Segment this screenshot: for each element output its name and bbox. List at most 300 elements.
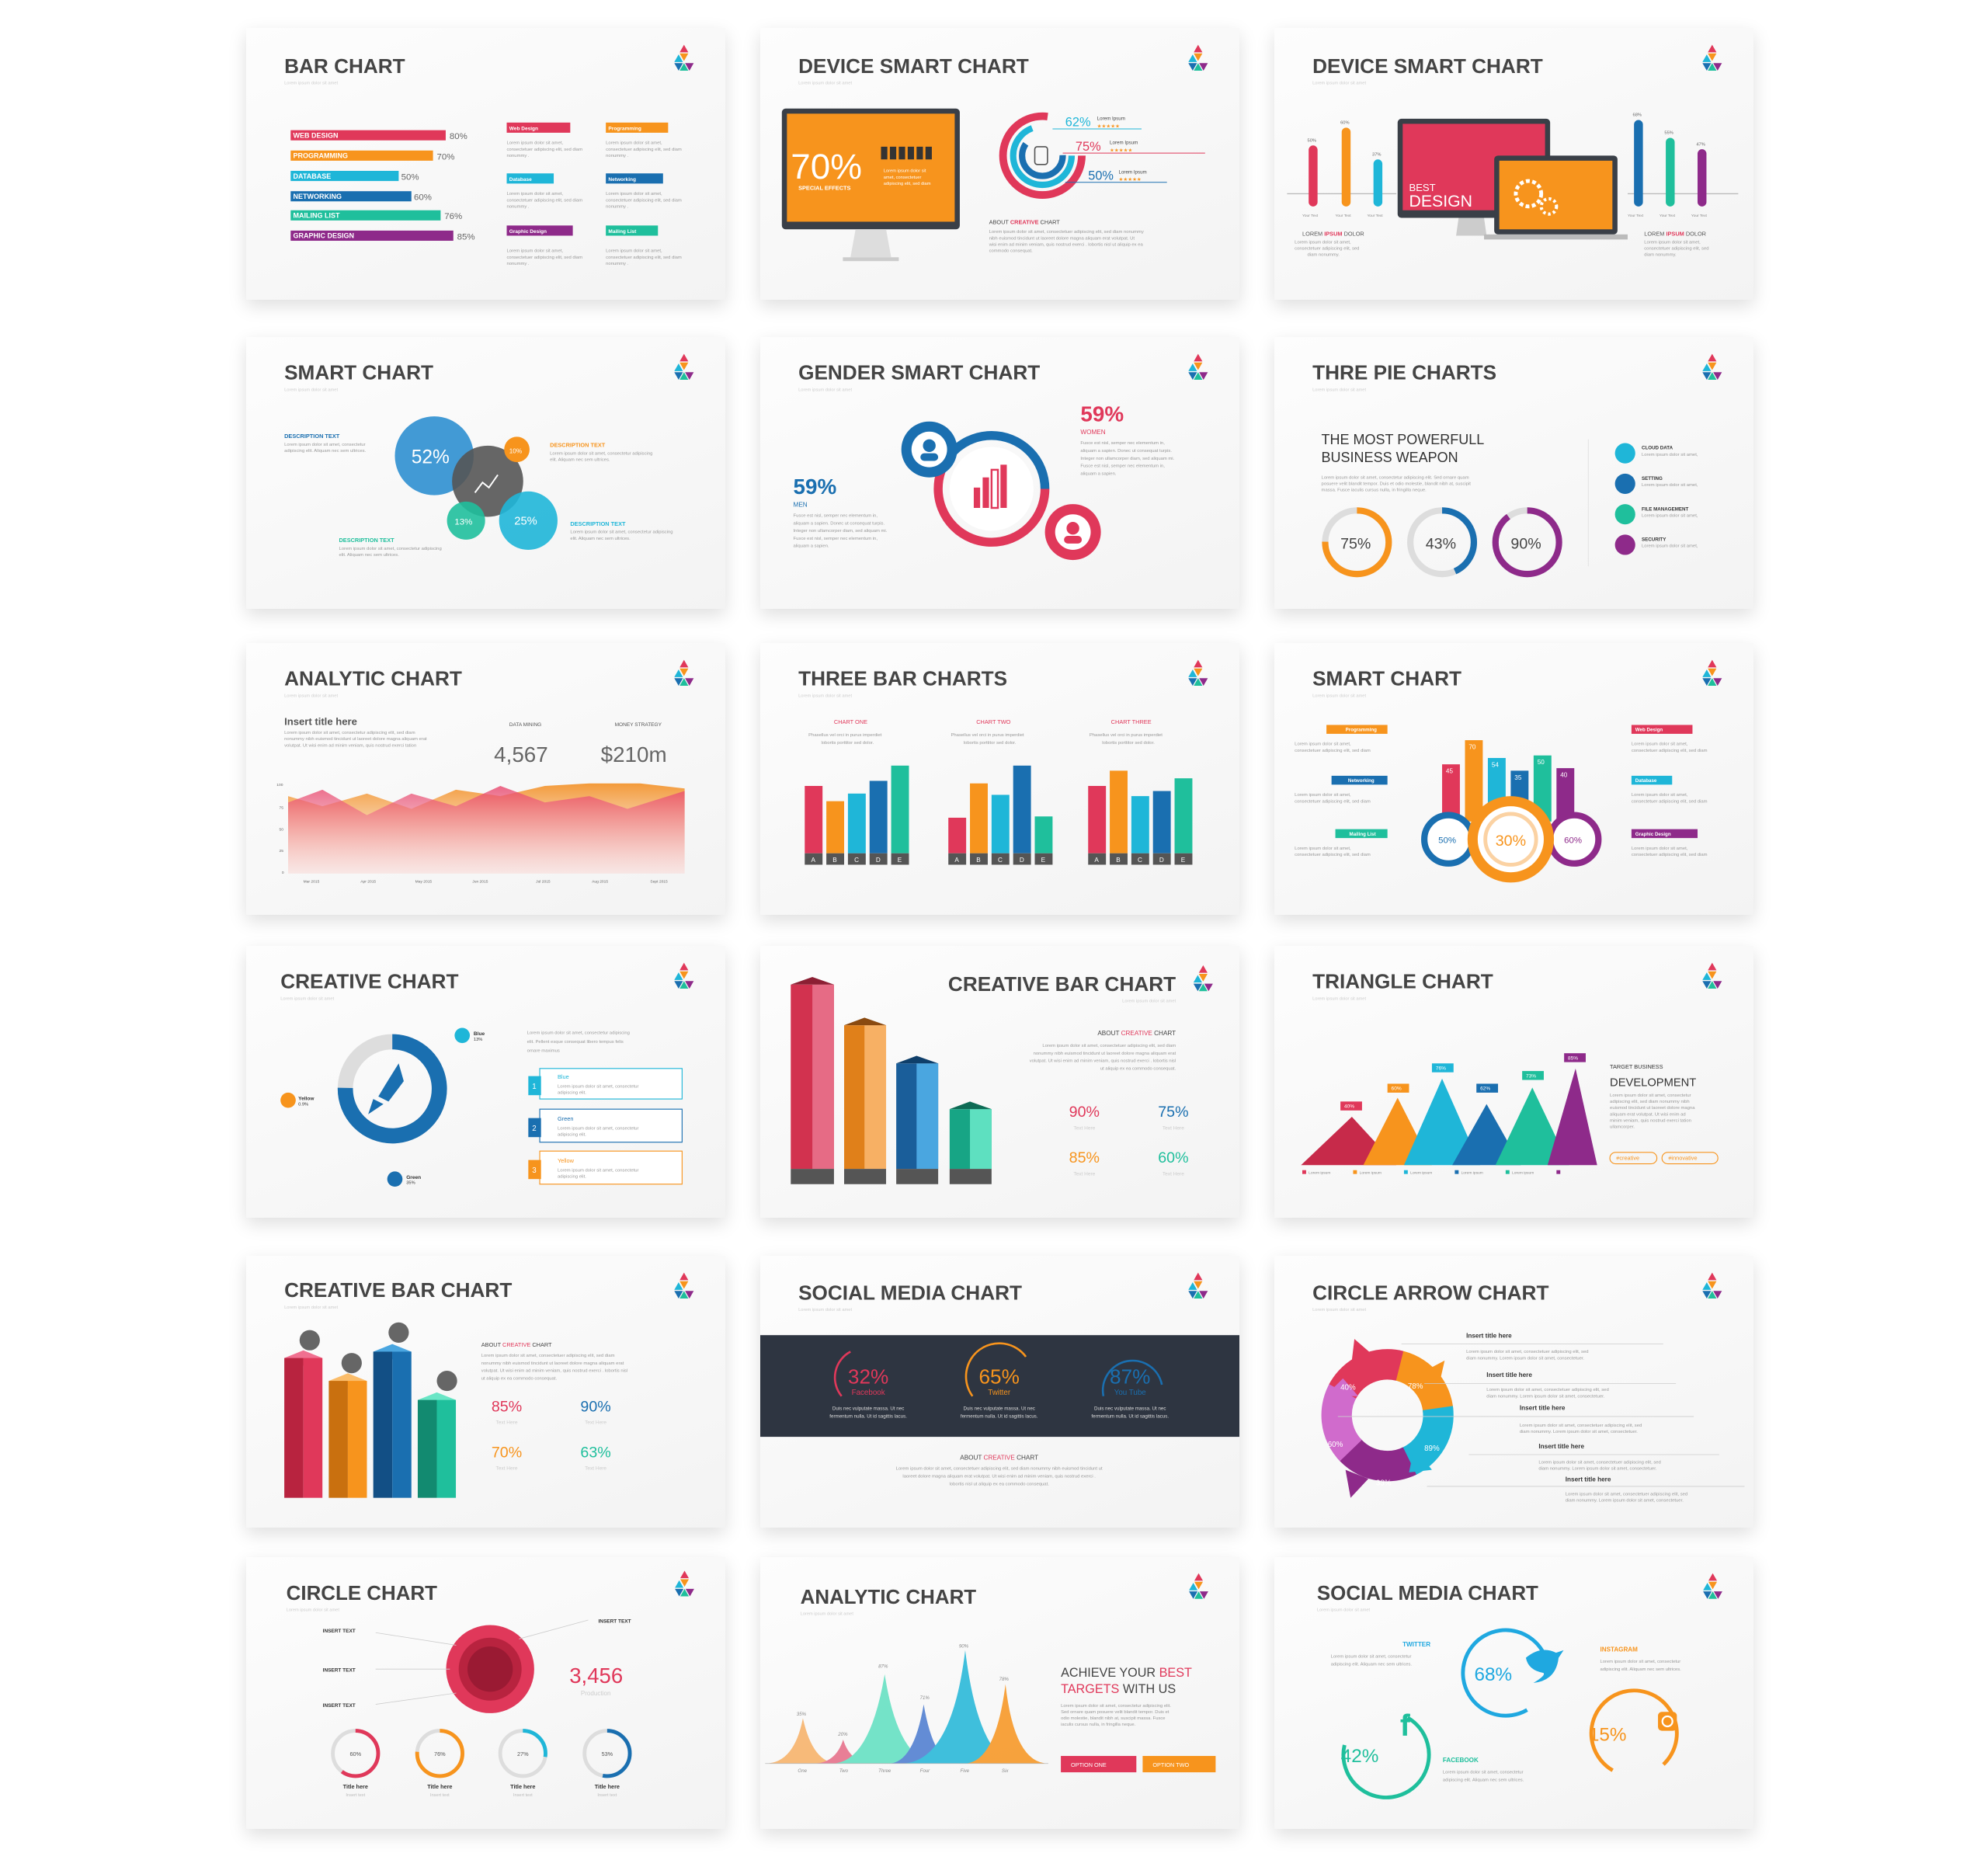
- insert titles: Lorem ipsum dolor sit amet, consectetuer adipiscing elit, sed: [1538, 1460, 1661, 1465]
- numbered boxes: Lorem ipsum dolor sit amet, consectetur: [558, 1168, 638, 1173]
- target text: [1610, 1063, 1718, 1164]
- chart two: lobortis porttitor sed dolor.: [964, 741, 1017, 746]
- panel: social media chart rings: [1274, 1557, 1753, 1829]
- stats: [494, 722, 667, 767]
- chart two: [948, 718, 1052, 864]
- target text: TARGET BUSINESS: [1610, 1063, 1663, 1070]
- about text: ut aliquip ex ea commodo consequat.: [1100, 1066, 1176, 1071]
- about text: ABOUT CREATIVE CHART: [481, 1341, 552, 1348]
- panel: smart chart venn: [246, 337, 725, 609]
- numbered boxes: Green: [558, 1115, 573, 1122]
- panel: circle chart: Title here: [343, 1783, 368, 1790]
- icon: logo: [674, 963, 693, 989]
- description texts: DESCRIPTION TEXT: [339, 537, 394, 544]
- men stat: Fusce est nisl, semper nec elementum in,: [794, 513, 878, 518]
- instagram ring: 15%: [1589, 1725, 1627, 1746]
- horizontal bars: GRAPHIC DESIGN: [294, 232, 354, 240]
- area chart: 50: [280, 827, 283, 832]
- chart three: C: [1138, 857, 1142, 864]
- panel: three pie charts: 90%: [1510, 535, 1541, 552]
- numbered boxes: adipiscing elit.: [558, 1133, 586, 1138]
- intro text: elit. Pellent esque consequat libero tempus felis: [527, 1040, 624, 1045]
- triangles: [1301, 1053, 1597, 1176]
- insert titles: Lorem ipsum dolor sit amet, consectetuer adipiscing elit, sed: [1520, 1424, 1642, 1428]
- icon list: FILE MANAGEMENT: [1642, 506, 1688, 512]
- percentages: Text Here: [585, 1466, 606, 1472]
- chart one: D: [876, 857, 881, 864]
- women stat: [1080, 402, 1175, 476]
- left tags: Networking: [1348, 778, 1375, 784]
- women stat: aliquam a sapien. Donec ut consequat turpis.: [1080, 449, 1172, 454]
- percentages: 50%: [1088, 169, 1114, 183]
- panel: bar chart: [246, 28, 725, 300]
- about text: ut aliquip ex ea commodo consequat.: [481, 1376, 557, 1381]
- monitor: [782, 109, 960, 261]
- subheading: THE MOST POWERFULL: [1322, 432, 1484, 447]
- center bars and donuts: 30%: [1496, 833, 1526, 850]
- panel: bar chart: nonummy .: [507, 154, 530, 158]
- intro text: nonummy nibh euismod tincidunt ut laoreet dolore magna aliquam erat: [284, 737, 427, 742]
- panel: bar chart: Lorem ipsum dolor sit amet,: [507, 192, 563, 196]
- subheading: Lorem ipsum dolor sit amet, consectetur adipiscing elit. Sed ornare quam: [1322, 475, 1469, 480]
- percentages: Text Here: [1073, 1125, 1096, 1131]
- men stat: MEN: [794, 501, 808, 508]
- percentages: 85%: [1069, 1149, 1100, 1166]
- right tags: Database: [1635, 778, 1657, 784]
- panel: circle arrow chart: Lorem ipsum dolor sit amet: [1312, 1308, 1366, 1312]
- dark band with arcs: Duis nec vulputate massa. Ut nec: [1094, 1406, 1166, 1412]
- insert titles: diam nonummy. Lorem ipsum dolor sit amet, consectetuer.: [1566, 1499, 1684, 1504]
- target text: #creative: [1616, 1155, 1639, 1162]
- panel: circle chart: Lorem ipsum dolor sit amet: [287, 1608, 339, 1613]
- numbered boxes: Lorem ipsum dolor sit amet, consectetur: [558, 1084, 638, 1089]
- tags with descriptions: Web Design: [509, 127, 538, 132]
- subheading: BUSINESS WEAPON: [1322, 450, 1458, 465]
- buttons: OPTION ONE: [1071, 1761, 1107, 1768]
- left bar chart: consectetuer adipiscing elit, sed: [1295, 246, 1359, 251]
- women stat: Fusce est nisl, semper nec elementum in,: [1080, 441, 1165, 446]
- about text: commodo consequat.: [989, 249, 1033, 254]
- icon: logo: [1702, 1273, 1722, 1299]
- icon list: CLOUD DATA: [1642, 446, 1673, 451]
- facebook ring: Lorem ipsum dolor sit amet, consectetur: [1443, 1771, 1524, 1775]
- panel: circle chart: Insert text: [430, 1793, 450, 1798]
- panel: three pie charts: [1274, 337, 1753, 609]
- intro text: [284, 715, 427, 748]
- panel: creative bar chart 2: [246, 1256, 725, 1528]
- bubble chart: 25%: [514, 515, 537, 527]
- heading: CREATIVE CHART: [280, 970, 458, 993]
- about text: Lorem ipsum dolor sit amet, consectetuer adipiscing elit, sed diam nonummy nibh euismod tincidunt ut: [896, 1467, 1103, 1472]
- description texts: elit. Aliquam nec sem ultrices.: [570, 537, 631, 541]
- panel: bar chart: Lorem ipsum dolor sit amet,: [507, 249, 563, 254]
- tags with descriptions: [507, 123, 668, 235]
- horizontal bars: MAILING LIST: [294, 212, 340, 220]
- panel: bar chart: Lorem ipsum dolor sit amet,: [507, 141, 563, 146]
- about text: [989, 219, 1144, 254]
- triangles: 40%: [1344, 1104, 1354, 1110]
- panel: triangle chart: [1274, 946, 1753, 1218]
- about text: [896, 1455, 1103, 1486]
- left tags: Lorem ipsum dolor sit amet,: [1295, 847, 1351, 851]
- dark band with arcs: You Tube: [1114, 1389, 1146, 1397]
- icon list: Lorem ipsum dolor sit amet,: [1642, 544, 1698, 549]
- icon: logo: [1188, 354, 1208, 380]
- target text: Lorem ipsum dolor sit amet, consectetur: [1610, 1093, 1691, 1098]
- numbered boxes: adipiscing elit.: [558, 1175, 586, 1180]
- panel: three pie charts: 75%: [1340, 535, 1371, 552]
- description texts: Lorem ipsum dolor sit amet, consectetur: [284, 443, 366, 447]
- panel: social media chart dark: Lorem ipsum dolor sit amet: [798, 1308, 852, 1312]
- left bar chart: [1287, 120, 1396, 258]
- percentages: 70%: [492, 1444, 522, 1461]
- description texts: [284, 433, 673, 558]
- big red circle: INSERT TEXT: [323, 1667, 356, 1673]
- chart two: A: [954, 857, 959, 864]
- dark band with arcs: 65%: [978, 1365, 1020, 1388]
- panel: three bar charts: [760, 643, 1239, 915]
- panel: circle chart: Title here: [595, 1783, 620, 1790]
- left bar chart: Your Text: [1336, 214, 1351, 218]
- center bars and donuts: 40: [1560, 772, 1568, 779]
- left bar chart: Your Text: [1367, 214, 1383, 218]
- panel: circle chart: 76%: [434, 1750, 446, 1757]
- chart two: CHART TWO: [976, 718, 1011, 725]
- left bar chart: diam nonummy.: [1308, 253, 1340, 258]
- panel: creative chart: Lorem ipsum dolor sit amet: [280, 996, 335, 1001]
- circular arrows: 78%: [1408, 1382, 1423, 1391]
- about text: Lorem ipsum dolor sit amet, consectetuer adipiscing elit, sed diam nonummy: [989, 230, 1144, 235]
- panel: circle chart: 60%: [350, 1750, 362, 1757]
- description texts: adipiscing elit. Aliquam nec sem ultrices.: [284, 449, 367, 454]
- big red circle: INSERT TEXT: [323, 1629, 356, 1634]
- panel: smart chart donut bars: [1274, 643, 1753, 915]
- percentages: Lorem Ipsum: [1119, 169, 1147, 175]
- center bars and donuts: 35: [1514, 774, 1522, 781]
- panel: bar chart: consectetuer adipiscing elit, sed diam: [606, 148, 682, 152]
- about text: [481, 1341, 627, 1381]
- area chart: 0: [282, 871, 284, 875]
- panel: circle arrow chart: [1274, 1256, 1753, 1528]
- left bar chart: 50%: [1308, 138, 1316, 143]
- tags with descriptions: Database: [509, 177, 532, 183]
- icon: logo: [675, 1570, 694, 1597]
- icon: logo: [674, 1273, 693, 1299]
- numbered boxes: [528, 1069, 682, 1184]
- icon: logo: [1188, 660, 1208, 686]
- instagram ring: [1576, 1646, 1693, 1792]
- area chart: Jul 2015: [536, 879, 551, 884]
- subheading: massa. Fusce iaculis cursus nulla, in fringilla neque.: [1322, 488, 1427, 493]
- insert titles: diam nonummy. Lorem ipsum dolor sit amet, consectetuer.: [1538, 1467, 1657, 1472]
- heading: CREATIVE BAR CHART: [284, 1278, 512, 1302]
- center bars and donuts: [1424, 740, 1598, 878]
- heading: ANALYTIC CHART: [284, 667, 462, 690]
- heading: DEVICE SMART CHART: [798, 54, 1029, 78]
- chart three: lobortis porttitor sed dolor.: [1102, 741, 1155, 746]
- right tags: Lorem ipsum dolor sit amet,: [1632, 742, 1688, 747]
- chart one: [805, 718, 909, 864]
- donut with rocket: [280, 1027, 485, 1187]
- about text: lobortis nisl ut aliquip ex ea commodo consequat.: [950, 1482, 1049, 1486]
- monitor: amet, consectetuer: [884, 176, 921, 180]
- triangles: Lorem ipsum: [1360, 1171, 1382, 1176]
- area chart: Mar 2015: [304, 879, 320, 884]
- icon: logo: [674, 45, 693, 71]
- horizontal bars: 50%: [401, 172, 419, 182]
- peak chart: 90%: [959, 1644, 969, 1650]
- center bars and donuts: 50: [1538, 759, 1545, 766]
- achieve text: odio molestie, blandit nibh at, suscipit massa. Fusce: [1061, 1716, 1166, 1721]
- panel: three pie charts: Lorem ipsum dolor sit amet: [1312, 388, 1366, 392]
- heading: SMART CHART: [284, 361, 433, 384]
- right bar chart: Lorem ipsum dolor sit amet,: [1644, 240, 1701, 245]
- 3d bars: [791, 977, 992, 1184]
- twitter ring: TWITTER: [1402, 1641, 1430, 1648]
- insert titles: Insert title here: [1520, 1405, 1566, 1412]
- men stat: 59%: [794, 475, 836, 499]
- right bar chart: Your Text: [1691, 214, 1708, 218]
- horizontal bars: DATABASE: [294, 172, 331, 180]
- heading: GENDER SMART CHART: [798, 361, 1040, 384]
- panel: triangle chart: Lorem ipsum dolor sit amet: [1312, 996, 1366, 1001]
- panel: device smart chart 1: [760, 28, 1239, 300]
- area chart: May 2015: [415, 879, 432, 884]
- stats: 4,567: [494, 742, 548, 767]
- insert titles: Lorem ipsum dolor sit amet, consectetuer adipiscing elit, sed: [1486, 1388, 1609, 1392]
- description texts: Lorem ipsum dolor sit amet, consectetur adipiscing: [550, 451, 652, 456]
- dark band with arcs: fermentum nulla. Ut id sagittis lacus.: [1091, 1414, 1169, 1420]
- heading: CREATIVE BAR CHART: [948, 972, 1176, 996]
- icon list: SECURITY: [1642, 537, 1667, 543]
- bubble chart: 52%: [412, 447, 450, 468]
- target text: euismod tincidunt ut laoreet dolore magna: [1610, 1106, 1695, 1111]
- percentages: [492, 1398, 611, 1472]
- right tags: Web Design: [1635, 728, 1663, 733]
- horizontal bars: 70%: [436, 152, 454, 162]
- right bar chart: Your Text: [1660, 214, 1676, 218]
- circular arrows: [1315, 1339, 1459, 1498]
- left bar chart: 37%: [1372, 152, 1381, 157]
- intro text: Lorem ipsum dolor sit amet, consectetur adipiscing elit, sed diam: [284, 731, 415, 735]
- panel: analytic chart 2: Lorem ipsum dolor sit amet: [801, 1612, 853, 1617]
- devices: monitor and laptop: DESIGN: [1409, 192, 1472, 210]
- left tags: Programming: [1346, 728, 1377, 733]
- icon: logo: [1188, 45, 1208, 71]
- peak chart: 71%: [920, 1695, 930, 1701]
- heading: SMART CHART: [1312, 667, 1461, 690]
- percentages: ★★★★★: [1097, 123, 1120, 129]
- donut with rocket: Blue: [474, 1031, 485, 1037]
- chart one: lobortis porttitor sed dolor.: [822, 741, 874, 746]
- panel: bar chart: Lorem ipsum dolor sit amet,: [606, 249, 662, 254]
- right tags: Lorem ipsum dolor sit amet,: [1632, 847, 1688, 851]
- area chart: Sept 2015: [650, 879, 668, 884]
- chart two: Phasellus vel orci in purus imperdiet: [951, 733, 1024, 738]
- buttons: OPTION TWO: [1152, 1761, 1189, 1768]
- chart one: C: [854, 857, 859, 864]
- horizontal bars: NETWORKING: [294, 193, 342, 200]
- peak chart: Four: [920, 1768, 930, 1774]
- donut with rocket: 0.9%: [298, 1102, 308, 1107]
- twitter ring: Lorem ipsum dolor sit amet, consectetur: [1331, 1655, 1411, 1660]
- right tags: consectetuer adipiscing elit, sed diam: [1632, 799, 1708, 804]
- target text: aliquam erat volutpat. Ut wisi enim ad: [1610, 1112, 1686, 1117]
- facebook ring: 42%: [1341, 1746, 1378, 1767]
- panel: smart chart donut bars: Lorem ipsum dolor sit amet: [1312, 694, 1366, 698]
- icon list: Lorem ipsum dolor sit amet,: [1642, 513, 1698, 518]
- heading: BAR CHART: [284, 54, 405, 78]
- intro text: Insert title here: [284, 715, 357, 727]
- numbered boxes: 1: [532, 1083, 537, 1091]
- about text: nonummy nibh euismod tincidunt ut laoreet dolore magna aliquam erat: [481, 1361, 624, 1366]
- panel: smart chart venn: Lorem ipsum dolor sit amet: [284, 388, 338, 392]
- triangles: Lorem ipsum: [1512, 1171, 1534, 1176]
- area chart: Aug 2015: [592, 879, 608, 884]
- description texts: DESCRIPTION TEXT: [284, 433, 340, 440]
- peak chart: 78%: [999, 1677, 1010, 1682]
- insert titles: diam nonummy. Lorem ipsum dolor sit amet, consectetuer.: [1520, 1430, 1638, 1434]
- panel: creative bar chart 1: Lorem ipsum dolor sit amet: [1122, 1000, 1176, 1004]
- right bar chart: Your Text: [1628, 214, 1644, 218]
- right bar chart: 68%: [1633, 113, 1642, 118]
- icon list: Lorem ipsum dolor sit amet,: [1642, 483, 1698, 488]
- monitor: SPECIAL EFFECTS: [798, 185, 851, 192]
- panel: bar chart: consectetuer adipiscing elit, sed diam: [507, 256, 582, 260]
- horizontal bars: 60%: [414, 193, 432, 203]
- panel: gender smart chart: [760, 337, 1239, 609]
- small rings: [333, 1731, 630, 1776]
- panel: bar chart: nonummy .: [606, 154, 629, 158]
- about text: volutpat. Ut wisi enim ad minim veniam, quis nostrud exerci . lobortis nisl: [1030, 1059, 1176, 1064]
- triangles: 76%: [1436, 1066, 1446, 1071]
- description texts: DESCRIPTION TEXT: [550, 441, 606, 448]
- dark band with arcs: Facebook: [852, 1389, 885, 1397]
- horizontal bars: [290, 130, 475, 242]
- insert titles: diam nonummy. Lorem ipsum dolor sit amet, consectetuer.: [1486, 1394, 1605, 1399]
- percentages: ★★★★★: [1110, 147, 1132, 153]
- horizontal bars: 80%: [450, 132, 467, 141]
- left tags: Lorem ipsum dolor sit amet,: [1295, 793, 1351, 798]
- dark band with arcs: 87%: [1110, 1365, 1150, 1388]
- men stat: [794, 475, 888, 549]
- target text: DEVELOPMENT: [1610, 1077, 1696, 1090]
- about text: [1030, 1030, 1176, 1071]
- chart three: CHART THREE: [1111, 718, 1152, 725]
- percentages: [1052, 116, 1205, 183]
- peak chart: [765, 1644, 1048, 1774]
- insert titles: Insert title here: [1486, 1372, 1532, 1378]
- percentages: 63%: [580, 1444, 611, 1461]
- panel: device smart chart 2: [1274, 28, 1753, 300]
- tags with descriptions: Graphic Design: [509, 229, 547, 235]
- heading: THRE PIE CHARTS: [1312, 361, 1496, 384]
- dark band with arcs: Duis nec vulputate massa. Ut nec: [832, 1406, 904, 1412]
- circular arrows: 33%: [1376, 1479, 1392, 1487]
- triangles: 85%: [1568, 1055, 1578, 1061]
- chart three: D: [1159, 857, 1164, 864]
- dark band with arcs: fermentum nulla. Ut id sagittis lacus.: [829, 1414, 907, 1420]
- horizontal bars: 76%: [444, 212, 462, 221]
- peak chart: 35%: [797, 1712, 807, 1717]
- peak chart: One: [798, 1768, 808, 1774]
- heading: CIRCLE CHART: [287, 1583, 437, 1604]
- circular arrows: 60%: [1328, 1441, 1343, 1449]
- icon: logo: [1194, 965, 1213, 991]
- percentages: 90%: [580, 1398, 611, 1415]
- panel: creative bar chart 2: Lorem ipsum dolor sit amet: [284, 1305, 338, 1310]
- panel: creative bar chart 1: [760, 946, 1239, 1218]
- about text: volutpat. Ut wisi enim ad minim veniam, quis nostrud exerci . lobortis nisl: [481, 1369, 627, 1374]
- dark band with arcs: Twitter: [988, 1389, 1011, 1397]
- right bar chart: diam nonummy.: [1644, 253, 1677, 258]
- right bar chart: consectetuer adipiscing elit, sed: [1644, 246, 1709, 251]
- target text: #innovative: [1668, 1155, 1698, 1162]
- facebook ring: f: [1400, 1709, 1411, 1743]
- peak chart: Six: [1002, 1768, 1009, 1774]
- panel: bar chart: nonummy .: [507, 204, 530, 209]
- percentages: 90%: [1069, 1104, 1100, 1121]
- donut with rocket: 13%: [474, 1038, 482, 1042]
- panel: bar chart: consectetuer adipiscing elit, sed diam: [507, 198, 582, 203]
- big red circle: 3,456: [569, 1664, 623, 1688]
- area chart: Apr 2015: [360, 879, 376, 884]
- left bar chart: Lorem ipsum dolor sit amet,: [1295, 240, 1351, 245]
- panel: social media chart rings: Lorem ipsum dolor sit amet: [1317, 1608, 1371, 1613]
- panel: bar chart: nonummy .: [606, 262, 629, 266]
- right bar chart: LOREM IPSUM DOLOR: [1644, 230, 1706, 237]
- numbered boxes: adipiscing elit.: [558, 1091, 586, 1096]
- triangles: 60%: [1392, 1086, 1402, 1092]
- icon: logo: [1702, 354, 1722, 380]
- icon: logo: [1702, 963, 1722, 989]
- center bars and donuts: 54: [1492, 761, 1499, 768]
- horizontal bars: WEB DESIGN: [294, 131, 339, 139]
- about text: wisi enim ad minim veniam, quis nostrud exerci . lobortis nisl ut aliquip ex ea: [989, 243, 1144, 248]
- panel: bar chart: Lorem ipsum dolor sit amet: [284, 82, 338, 86]
- tags with descriptions: Mailing List: [608, 229, 637, 235]
- ring chart: [1003, 116, 1082, 195]
- intro text: ornare maximus: [527, 1049, 560, 1054]
- women stat: WOMEN: [1080, 429, 1106, 436]
- buttons: [1061, 1756, 1215, 1772]
- panel: circle chart: Insert text: [597, 1793, 617, 1798]
- chart one: E: [898, 857, 902, 864]
- triangles: 62%: [1480, 1086, 1490, 1092]
- area chart: 100: [276, 783, 283, 787]
- numbered boxes: Yellow: [558, 1157, 575, 1164]
- left bar chart: Your Text: [1302, 214, 1319, 218]
- percentages: 60%: [1158, 1149, 1189, 1166]
- icon: logo: [674, 660, 693, 686]
- percentages: Lorem Ipsum: [1110, 141, 1138, 146]
- panel: bar chart: consectetuer adipiscing elit, sed diam: [606, 256, 682, 260]
- panel: analytic chart 2: [760, 1557, 1239, 1829]
- triangles: 73%: [1526, 1073, 1536, 1079]
- big red circle: Production: [581, 1690, 611, 1697]
- numbered boxes: 2: [532, 1125, 537, 1133]
- 3d bars: [284, 1323, 457, 1498]
- chart one: B: [832, 857, 837, 864]
- about text: Lorem ipsum dolor sit amet, consectetuer adipiscing elit, sed diam: [1042, 1044, 1176, 1048]
- panel: analytic chart 1: [246, 643, 725, 915]
- left tags: Mailing List: [1350, 832, 1376, 837]
- panel: circle chart: 27%: [517, 1750, 529, 1757]
- percentages: ★★★★★: [1119, 176, 1142, 183]
- subheading: posuere velit blandit tempor. Duis et odio molestie, blandit nibh at, suscipit: [1322, 482, 1471, 487]
- achieve text: [1061, 1666, 1192, 1727]
- panel: device smart chart 2: Lorem ipsum dolor sit amet: [1312, 82, 1366, 86]
